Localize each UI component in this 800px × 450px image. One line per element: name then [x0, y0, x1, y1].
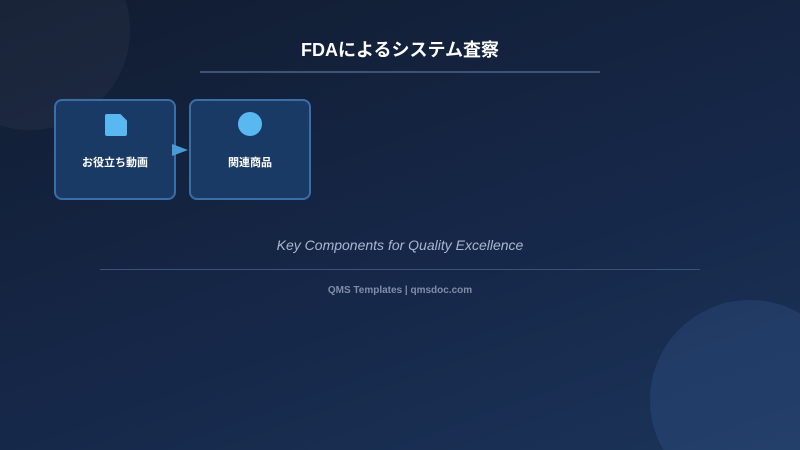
card: videos: お役立ち動画	[82, 157, 148, 169]
card: products: 関連商品	[228, 157, 272, 169]
footer: QMS Templates | qmsdoc.com	[328, 285, 472, 296]
icon: document	[105, 114, 127, 136]
title: FDAによるシステム査察	[301, 40, 499, 60]
card: products	[189, 99, 311, 200]
subtitle: Key Components for Quality Excellence	[277, 237, 523, 253]
icon: circle	[238, 112, 262, 136]
arrow	[172, 144, 188, 156]
card: videos	[54, 99, 176, 200]
